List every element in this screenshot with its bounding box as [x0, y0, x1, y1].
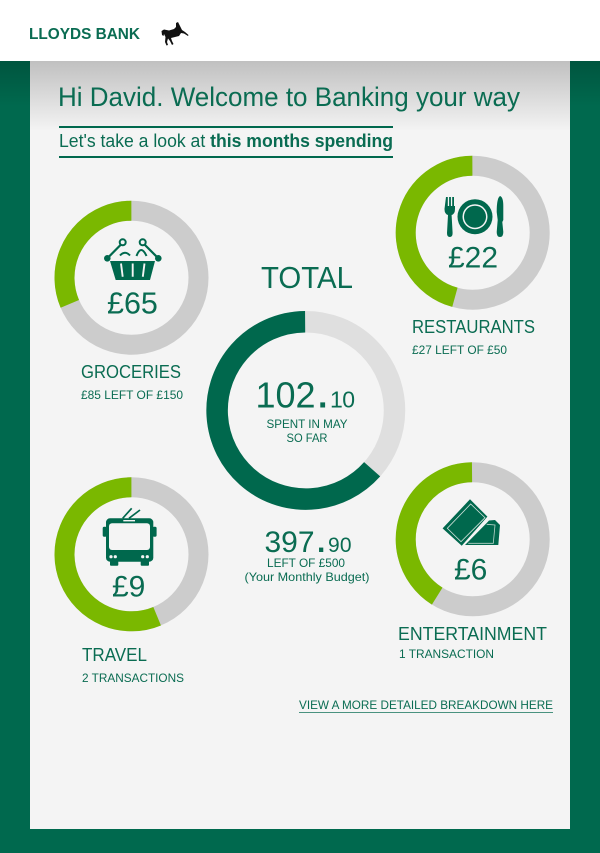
figure: remaining: . [317, 526, 325, 559]
logo wordmark: LLOYDS BANK [29, 26, 140, 43]
caption: budget: LEFT OF £500 [267, 556, 345, 570]
figure: spent: . [318, 378, 327, 416]
amount: travel: £9 [112, 571, 145, 604]
icon: shopping basket [104, 239, 162, 280]
donut chart: groceries [44, 190, 219, 366]
label: groceries: GROCERIES [81, 362, 181, 382]
donut chart: total [181, 285, 431, 536]
label: travel: TRAVEL [82, 645, 147, 665]
figure: remaining: 397 [264, 526, 315, 559]
panel: groceries [44, 190, 219, 402]
sublabel: restaurants: £27 LEFT OF £50 [412, 343, 507, 357]
amount: entertainment: £6 [454, 554, 487, 586]
icon: tickets [443, 500, 500, 545]
amount: groceries: £65 [107, 286, 158, 320]
caption: spent in May [266, 417, 348, 445]
figure: remaining [264, 526, 352, 559]
icon: plate and cutlery [444, 196, 503, 237]
panel: travel [44, 467, 219, 685]
amount: restaurants: £22 [448, 242, 498, 274]
sublabel: groceries: £85 LEFT OF £150 [81, 388, 183, 402]
sublabel: travel: 2 TRANSACTIONS [82, 671, 184, 685]
donut chart: restaurants [390, 150, 555, 315]
link: detailed breakdown: VIEW A MORE DETAILED BREAKDOWN HERE [299, 698, 553, 712]
panel: restaurants [390, 150, 555, 357]
caption: budget: (Your Monthly Budget) [244, 570, 370, 584]
donut chart: travel [44, 467, 219, 642]
donut chart: entertainment [380, 447, 565, 632]
figure: spent: 102 [256, 375, 316, 416]
label: entertainment: ENTERTAINMENT [398, 624, 547, 644]
panel: entertainment [380, 447, 565, 661]
heading: total: TOTAL [261, 260, 353, 295]
label: restaurants: RESTAURANTS [412, 317, 535, 337]
header: Lloyds Bank logo [29, 22, 188, 46]
icon: black horse [162, 22, 188, 46]
caption: spent in May: SO FAR [286, 431, 328, 445]
subheading with rules: Let's take a look at this months spending [59, 131, 393, 151]
sublabel: entertainment: 1 TRANSACTION [399, 647, 494, 661]
figure: spent: 10 [330, 387, 355, 413]
title: Hi David. Welcome to Banking your way [58, 82, 520, 112]
caption: budget [244, 556, 370, 584]
figure: remaining: 90 [328, 534, 352, 557]
figure: spent [256, 375, 355, 416]
caption: spent in May: SPENT IN MAY [266, 417, 348, 431]
panel: total [181, 260, 431, 584]
icon: trolley bus [103, 508, 157, 566]
